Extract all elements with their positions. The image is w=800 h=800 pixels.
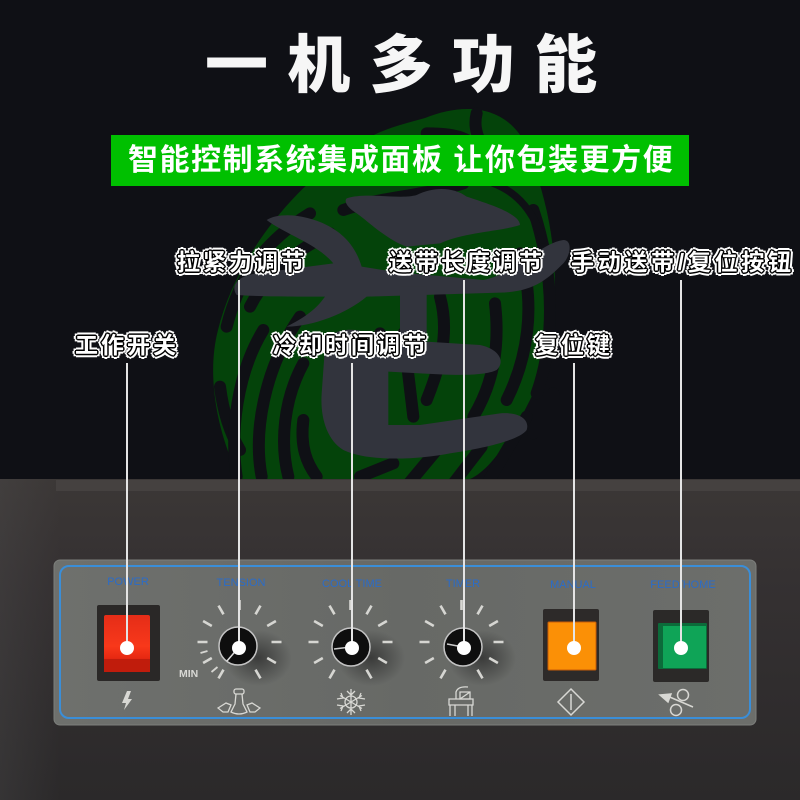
- pointer: manual: [567, 363, 581, 655]
- MIN label: MIN: [179, 668, 198, 680]
- panel labels: TENSION: [217, 577, 265, 589]
- power switch: [97, 605, 160, 681]
- control plate: [54, 560, 756, 725]
- manual button: [543, 609, 599, 681]
- banner: 智能控制系统集成面板 让你包装更方便: [128, 144, 674, 177]
- label: manual feed: 手动送带/复位按钮: [571, 249, 795, 275]
- label: reset: 复位键: [535, 332, 613, 358]
- icon: machine: [449, 687, 473, 716]
- fingerprint watermark: [213, 109, 555, 490]
- panel labels: POWER: [107, 576, 149, 588]
- tension knob: [219, 627, 257, 665]
- panel labels: FEED/HOME: [650, 579, 716, 591]
- watermark glyph: [234, 189, 570, 459]
- icon: diamond: [558, 689, 584, 715]
- pointer: timer: [457, 280, 471, 655]
- panel labels: COOL TIME: [322, 578, 382, 590]
- pointer: cool time: [345, 363, 359, 655]
- panel labels: [107, 576, 716, 591]
- label: cooling: 冷却时间调节: [273, 332, 429, 358]
- icon: lightning: [122, 691, 132, 710]
- cool time knob: [332, 628, 370, 666]
- label: power: 工作开关: [75, 332, 179, 358]
- panel labels: TIMER: [446, 578, 480, 590]
- icon: tension: [218, 689, 260, 714]
- icon: feed: [660, 690, 693, 716]
- label: tension: 拉紧力调节: [177, 249, 307, 275]
- icon: snowflake: [337, 689, 365, 715]
- feed button: [653, 610, 709, 682]
- banner: [111, 135, 689, 186]
- pointer: tension: [232, 280, 246, 655]
- pointer: power: [120, 363, 134, 655]
- timer knob: [444, 628, 482, 666]
- machine body: [0, 479, 800, 800]
- label: feed length: 送带长度调节: [389, 249, 545, 275]
- panel labels: MANUAL: [550, 579, 596, 591]
- dial ticks: [198, 600, 504, 678]
- knob shadows: [224, 630, 516, 686]
- title: 一机多功能: [205, 31, 616, 101]
- pointer: feed: [674, 280, 688, 655]
